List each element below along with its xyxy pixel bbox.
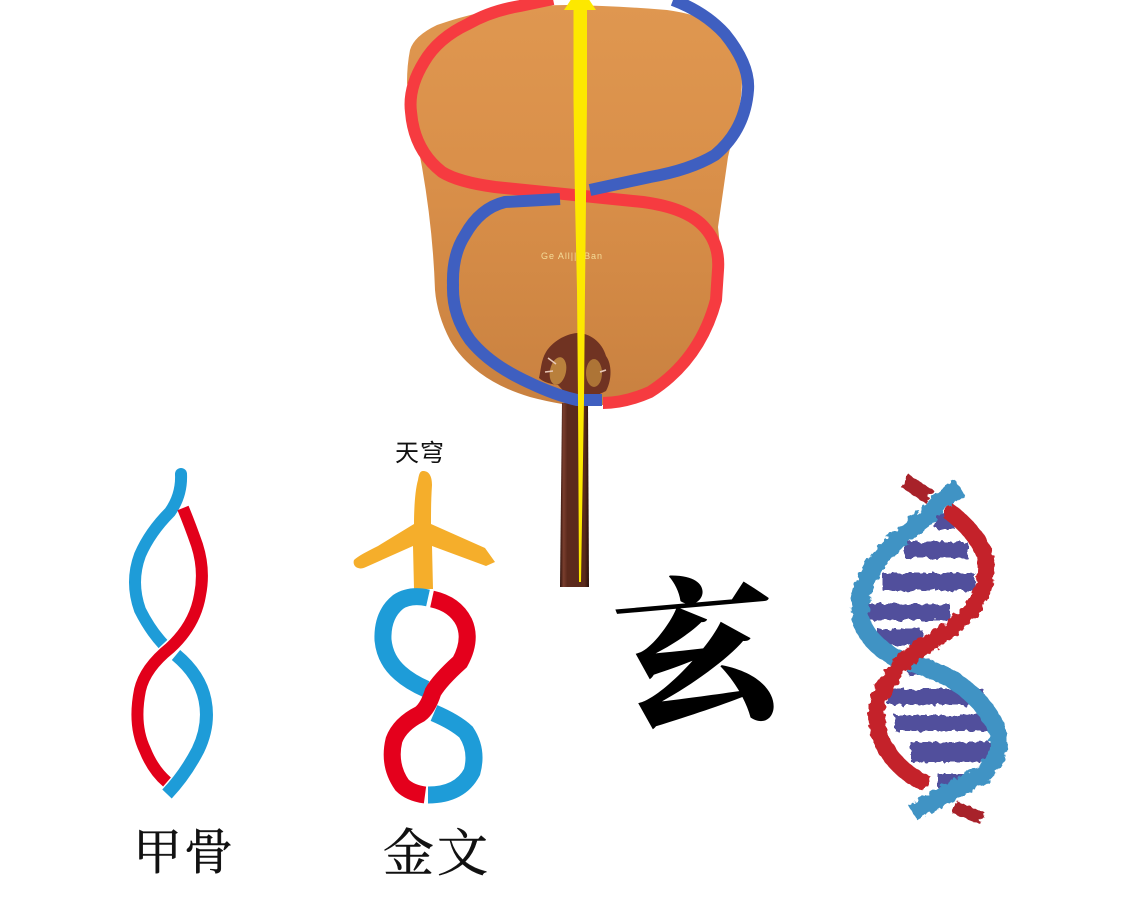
dna red end top (905, 481, 930, 497)
dna helix (860, 481, 998, 818)
sky label: 天穹 (395, 440, 444, 467)
fan leaf (407, 5, 742, 405)
red strand on fan (411, 0, 718, 403)
blue upper arc (383, 597, 428, 689)
blue strand upper (135, 474, 181, 644)
dna base pairs (868, 521, 994, 782)
red s-curve (392, 599, 467, 795)
dna red end bottom (954, 807, 982, 818)
dna blue strand (860, 488, 998, 813)
fan illustration (407, 0, 748, 587)
blue lower arc (428, 713, 474, 795)
fan handle (560, 403, 589, 587)
xuan character: 玄 (608, 561, 799, 755)
bronze script glyph (354, 471, 495, 795)
fan small mark: Ge All||| Ban (541, 251, 602, 261)
red strand (137, 508, 202, 782)
oracle bone label: 甲骨 (133, 825, 233, 880)
bronze script label: 金文 (383, 827, 488, 883)
blue top cap (175, 468, 187, 480)
fan knob ornament (539, 333, 610, 401)
dna red strand (876, 510, 986, 784)
yellow arrow (564, 0, 596, 582)
oracle bone glyph (135, 468, 206, 794)
blue strand on fan (453, 0, 748, 400)
blue strand lower (167, 655, 206, 794)
orange sky symbol (354, 471, 495, 589)
